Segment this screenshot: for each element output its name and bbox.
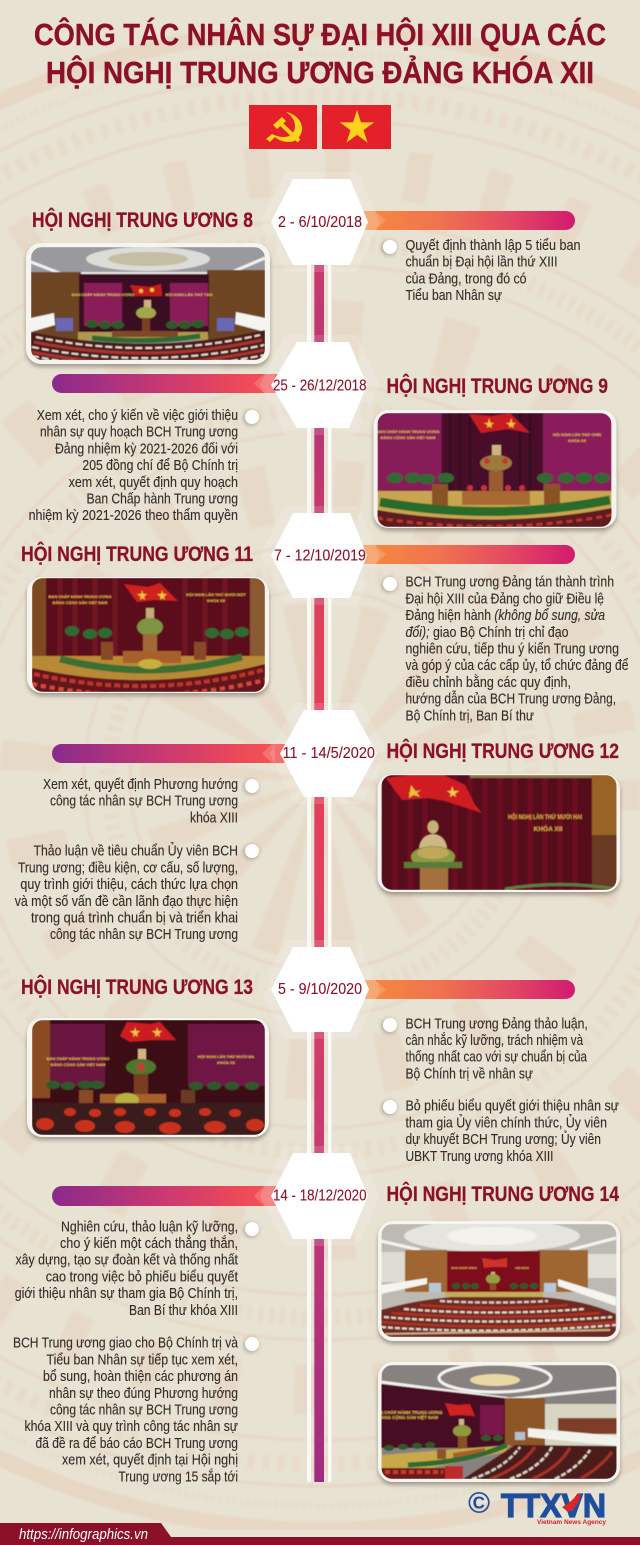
text: section 5 second item: tham gia Ủy viên chính thức, Ủy viên	[406, 1113, 607, 1131]
text: section 2: 205 đồng chí để Bộ Chính trị	[82, 458, 238, 474]
text: section 4 second item: quy trình giới thiệu, cách thức lựa chọn	[20, 877, 238, 893]
section 3: date hexagon: 7 - 12/10/2019	[274, 548, 366, 565]
bullet: section 4 first	[244, 779, 259, 794]
text: section 4 first item: Xem xét, quyết định Phương hướng	[43, 777, 238, 793]
footer: website band	[0, 1523, 640, 1545]
bullet: section 1	[382, 240, 397, 256]
logo: TTXVN: TTXVN	[501, 1487, 606, 1524]
text: section 5 first item: cân nhắc kỹ lưỡng, trách nhiệm và	[406, 1032, 584, 1049]
text: section 6 second item: khóa XIII và quy trình công tác nhân sự	[24, 1419, 238, 1435]
text: section 1: Quyết định thành lập 5 tiểu ban	[406, 238, 580, 254]
text: section 3: điều chỉnh bằng các quy định,	[406, 674, 571, 691]
text: section 6 first item: giới thiệu nhân sự tham gia Bộ Chính trị,	[15, 1286, 238, 1302]
footer: website band: https://infographics.vn	[19, 1526, 148, 1543]
section 4: date bar	[52, 744, 292, 763]
text: section 6 second item: bổ sung, hoàn thiện các phương án	[43, 1369, 238, 1385]
photo: Hội nghị Trung ương 14 full hall: BAN CHẤP HÀNH	[451, 1265, 477, 1270]
section 4: date hexagon	[270, 703, 388, 804]
text: section 6 first item: cho ý kiến một cách thẳng thắn,	[60, 1234, 238, 1252]
photo: Hội nghị Trung ương 14 angled hall: BAN CHẤP HÀNH TRUNG ƯƠNG	[373, 1410, 443, 1415]
section 2: date bar	[52, 374, 292, 393]
text: section 4 second item: và một số vấn đề cần lãnh đạo thực hiện	[15, 894, 238, 910]
bullet: section 2	[244, 410, 259, 426]
text: section 5 second item: UBKT Trung ương khóa XIII	[406, 1149, 554, 1165]
photo: Hội nghị Trung ương 13 stage and delegates: BAN CHẤP HÀNH TRUNG ƯƠNG	[47, 1056, 109, 1061]
title: HỘI NGHỊ TRUNG ƯƠNG ĐẢNG KHÓA XII	[46, 54, 594, 90]
text: section 1: chuẩn bị Đại hội lần thứ XIII	[406, 255, 558, 271]
title	[34, 16, 606, 90]
section 6: date hexagon: 14 - 18/12/2020	[273, 1188, 367, 1205]
text: section 5 second item	[406, 1099, 619, 1165]
text: section 6 first item	[15, 1219, 238, 1319]
text: section 2: nhân sự quy hoạch BCH Trung ương	[40, 425, 238, 441]
text: section 2: Xem xét, cho ý kiến về việc giới thiệu	[37, 408, 238, 424]
section 6: date hexagon	[260, 1146, 380, 1246]
bullet: section 5 first	[382, 1018, 397, 1034]
text: section 6 second item: Trung ương 15 sắp tới	[118, 1468, 238, 1485]
photo: Hội nghị Trung ương 9 stage: KHÓA XII	[568, 438, 586, 443]
text: section 6 second item: Tiểu ban Nhân sự tiếp tục xem xét,	[46, 1352, 238, 1368]
text: section 4 first item: khóa XIII	[190, 810, 238, 826]
text: section 4 second item: trong quá trình chuẩn bị và triển khai	[31, 910, 238, 926]
photo: Hội nghị Trung ương 13 stage and delegates	[27, 1018, 269, 1140]
section 3: date bar	[350, 545, 575, 564]
text: section 4 first item: công tác nhân sự BCH Trung ương	[50, 794, 238, 810]
photo: Hội nghị Trung ương 9 stage: ĐẢNG CỘNG SẢN VIỆT NAM	[381, 435, 436, 440]
photo: Hội nghị Trung ương 14 full hall	[378, 1220, 620, 1344]
text: section 5 first item: BCH Trung ương Đảng thảo luận,	[406, 1016, 588, 1032]
text: section 4 second item: Trung ương; điều kiện, cơ cấu, số lượng,	[18, 860, 238, 876]
photo: Hội nghị Trung ương 12 bust and flag: HỘI NGHỊ LẦN THỨ MƯỜI HAI	[508, 811, 582, 821]
section 1: date hexagon: 2 - 6/10/2018	[278, 214, 362, 231]
section 3: date hexagon	[260, 506, 380, 605]
heading: Hội nghị Trung ương 13: HỘI NGHỊ TRUNG ƯƠNG 13	[21, 975, 253, 999]
text: section 4 second item: Thảo luận về tiêu chuẩn Ủy viên BCH	[34, 842, 238, 860]
icon: national flag	[322, 105, 391, 149]
photo: Hội nghị Trung ương 14 angled hall	[373, 1362, 620, 1485]
text: section 4 first item	[43, 777, 238, 826]
photo: Hội nghị Trung ương 8 hall: HỘI NGHỊ LẦN THỨ TÁM	[165, 292, 213, 297]
bullet: section 5 second	[382, 1100, 397, 1116]
text: section 1: của Đảng, trong đó có	[406, 272, 526, 288]
photo: Hội nghị Trung ương 11 stage	[27, 577, 269, 696]
text: section 6 second item: công tác nhân sự BCH Trung ương	[50, 1402, 238, 1418]
text: section 6 second item: nhân sự theo đúng Phương hướng	[49, 1386, 238, 1402]
section 5: date bar	[350, 980, 575, 999]
text: section 5 first item: thống nhất cao với sự chuẩn bị của	[406, 1050, 588, 1066]
text: section 2: nhiệm kỳ 2021-2026 theo thẩm quyền	[29, 508, 238, 524]
photo: Hội nghị Trung ương 13 stage and delegates: HỘI NGHỊ LẦN THỨ MƯỜI BA	[198, 1054, 254, 1059]
photo: Hội nghị Trung ương 12 bust and flag	[378, 774, 620, 895]
photo: Hội nghị Trung ương 8 hall	[26, 243, 270, 367]
timeline: vertical axis	[307, 265, 332, 1482]
photo: Hội nghị Trung ương 11 stage: ĐẢNG CỘNG SẢN VIỆT NAM	[53, 600, 108, 605]
text: section 3: đổi); giao Bộ Chính trị chỉ đạo	[406, 625, 568, 641]
text: section 2: xem xét, quyết định quy hoạch	[69, 475, 238, 491]
bullet: section 6 second	[244, 1337, 259, 1352]
text: section 1	[406, 238, 580, 304]
text: section 6 second item: BCH Trung ương giao cho Bộ Chính trị và	[13, 1336, 239, 1352]
photo: Hội nghị Trung ương 11 stage: KHÓA XII	[207, 598, 225, 603]
section 6: date bar	[52, 1186, 292, 1206]
text: section 6 second item: đã đề ra để báo cáo BCH Trung ương	[36, 1436, 238, 1452]
section 2: date hexagon	[260, 335, 380, 435]
text: section 4 second item: công tác nhân sự BCH Trung ương	[50, 927, 238, 943]
text: section 4 second item	[15, 842, 238, 943]
text: section 6 first item: cao trong việc bỏ phiếu biểu quyết	[46, 1269, 238, 1285]
section 1: date hexagon	[260, 172, 380, 272]
photo: Hội nghị Trung ương 13 stage and delegates: KHÓA XII	[217, 1060, 235, 1065]
photo: Hội nghị Trung ương 13 stage and delegates: ĐẢNG CỘNG SẢN VIỆT NAM	[51, 1062, 106, 1067]
section 4: date hexagon: 11 - 14/5/2020	[282, 745, 375, 762]
photo: Hội nghị Trung ương 11 stage: HỘI NGHỊ LẦN THỨ MƯỜI MỘT	[186, 592, 246, 597]
text: section 6 first item: xây dựng, tạo sự đoàn kết và thống nhất	[16, 1253, 238, 1269]
heading: Hội nghị Trung ương 11: HỘI NGHỊ TRUNG ƯƠNG 11	[21, 542, 253, 566]
section 2: date hexagon: 25 - 26/12/2018	[273, 378, 367, 395]
text: section 3: Đại hội XIII của Đảng cho giữ Điều lệ	[406, 591, 604, 607]
photo: Hội nghị Trung ương 14 full hall: HỘI NGHỊ	[515, 1265, 529, 1270]
photo: Hội nghị Trung ương 9 stage: HỘI NGHỊ LẦN THỨ CHÍN	[553, 432, 601, 437]
logo: TTXVN: ©	[468, 1487, 490, 1520]
icon: party flag	[249, 105, 317, 149]
text: section 6 second item: xem xét, quyết định tại Hội nghị	[62, 1453, 238, 1469]
photo: Hội nghị Trung ương 8 hall: BAN CHẤP HÀNH TRUNG ƯƠNG	[72, 292, 134, 297]
bullet: section 3	[382, 577, 397, 592]
heading: Hội nghị Trung ương 8: HỘI NGHỊ TRUNG ƯƠNG 8	[32, 208, 253, 232]
section 5: date hexagon	[260, 940, 380, 1039]
section 5: date hexagon: 5 - 9/10/2020	[278, 981, 362, 998]
text: section 5 first item	[406, 1016, 588, 1082]
text: section 6 second item	[13, 1336, 239, 1485]
text: section 6 first item: Ban Bí thư khóa XIII	[129, 1303, 238, 1319]
text: section 3	[406, 575, 628, 724]
photo: Hội nghị Trung ương 9 stage	[374, 410, 616, 531]
text: section 1: Tiểu ban Nhân sự	[406, 288, 502, 304]
text: section 6 first item: Nghiên cứu, thảo luận kỹ lưỡng,	[61, 1219, 238, 1235]
text: section 3: Đảng hiện hành (không bổ sung, sửa	[406, 608, 605, 624]
text: section 3: Bộ Chính trị, Ban Bí thư	[406, 708, 534, 724]
logo: TTXVN: Vietnam News Agency	[537, 1519, 606, 1526]
photo: Hội nghị Trung ương 12 bust and flag: KHÓA XII	[534, 824, 563, 833]
photo: Hội nghị Trung ương 14 angled hall: ĐẢNG CỘNG SẢN VIỆT NAM	[378, 1415, 438, 1420]
text: section 2: Ban Chấp hành Trung ương	[86, 492, 238, 508]
text: section 2: Đảng nhiệm kỳ 2021-2026 đối với	[55, 442, 238, 458]
section 1: date bar	[350, 211, 575, 230]
text: section 2	[29, 408, 238, 524]
bullet: section 6 first	[244, 1222, 259, 1238]
photo: Hội nghị Trung ương 9 stage: BAN CHẤP HÀNH TRUNG ƯƠNG	[377, 429, 439, 434]
text: section 5 second item: dự khuyết BCH Trung ương; Ủy viên	[406, 1130, 601, 1148]
bullet: section 4 second	[244, 844, 259, 860]
text: section 5 first item: Bộ Chính trị về nhân sự	[406, 1066, 533, 1082]
photo: Hội nghị Trung ương 11 stage: BAN CHẤP HÀNH TRUNG ƯƠNG	[49, 594, 111, 599]
